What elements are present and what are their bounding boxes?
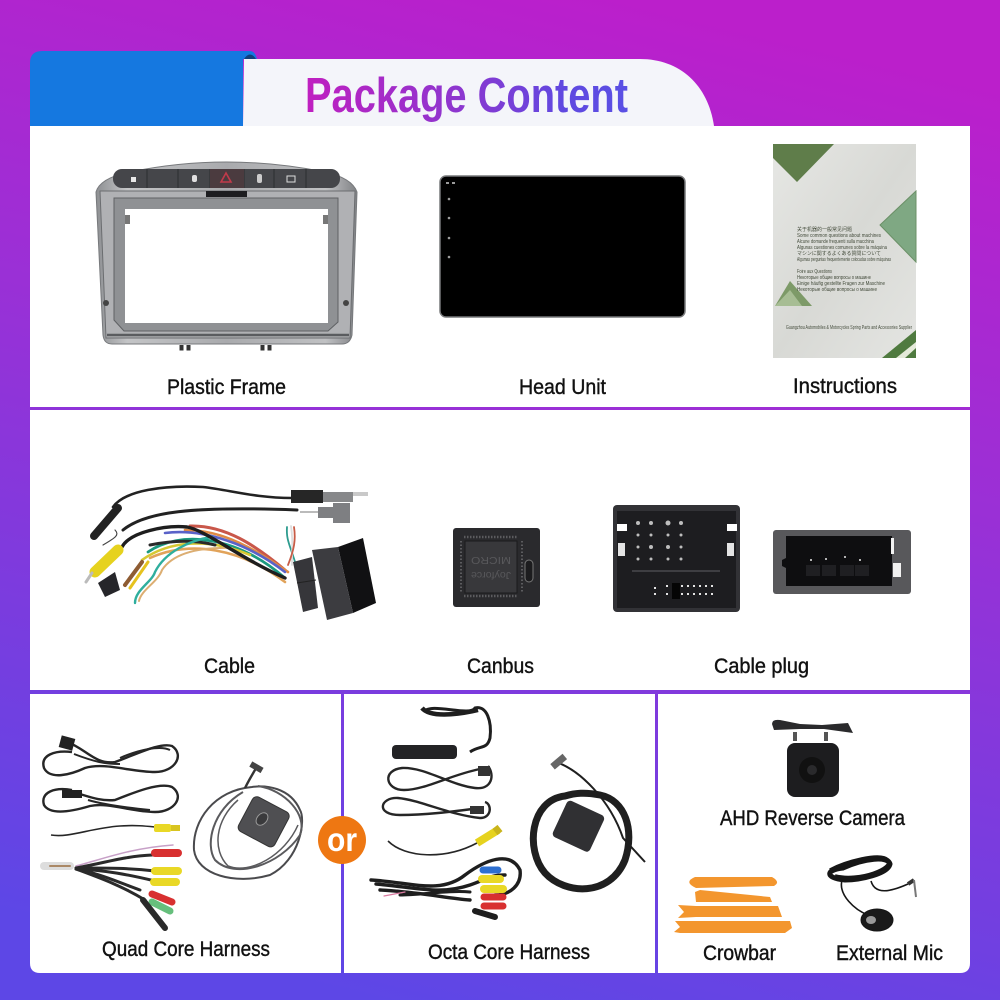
instructions booklet: Foire aux Questions [797,269,832,275]
RCA harness [44,845,178,928]
or badge: or [327,821,357,858]
USB cables [43,742,178,836]
yellow RCA [477,830,498,843]
label: External Mic [836,942,943,965]
header tab [30,51,714,126]
reverse camera [772,720,853,797]
GPS antenna [194,761,302,879]
instructions booklet: Algunas cuestiones comunes sobre la máquina [797,245,887,251]
window [125,209,328,323]
label: Cable [204,655,255,678]
harness loops [383,766,492,855]
label: Canbus [467,655,534,678]
panel: main items [30,126,970,407]
canbus box [453,528,540,607]
cable harness [86,487,297,603]
instructions booklet: Guangzhou Automobiles & Motorcycles Spring Parts and Accessories Supplier [786,325,912,331]
radio antenna [392,708,490,759]
label: Head Unit [519,376,606,399]
instructions booklet: Некоторые общие вопросы о машине [797,275,871,281]
label: Octa Core Harness [428,941,590,964]
GPS antenna [533,754,645,889]
canbus box: Joyforce [471,569,511,580]
canbus box: MICRO [471,554,511,565]
plastic frame [96,162,357,350]
label: Cable plug [714,655,809,678]
main connector [98,538,376,620]
label: Plastic Frame [167,376,286,399]
instructions booklet: Некоторые общие вопросы о машине [797,287,877,293]
label: Crowbar [703,942,776,965]
instructions booklet [773,144,916,358]
label: Instructions [793,375,897,398]
head unit [440,176,685,317]
instructions booklet: マシンに関するよくある質問について [797,250,881,257]
panel: octa core harness [344,694,655,973]
RCA harness [371,859,520,917]
button bar [113,169,340,188]
panel: accessories [658,694,970,973]
instructions booklet: Alcune domande frequenti sulla macchina [797,239,874,245]
instructions booklet: Einige häufig gestellte Fragen zur Maschine [797,281,885,287]
crowbar tools [674,877,792,933]
panel: cable items [30,410,970,690]
external mic [830,857,916,931]
label: Quad Core Harness [102,938,270,961]
instructions booklet: 关于机器的一般常见问题 [797,226,852,233]
panel: quad core harness [30,694,341,973]
instructions booklet: Algumas perguntas frequentemente colocadas sobre máquinas [797,257,891,263]
cable plug large [613,505,740,612]
or badge [318,816,366,864]
title: Package Content [305,69,628,123]
label: AHD Reverse Camera [720,807,905,830]
antenna plug [291,490,368,523]
instructions booklet: Some common questions about machines [797,233,881,239]
cable plug small [773,530,911,594]
